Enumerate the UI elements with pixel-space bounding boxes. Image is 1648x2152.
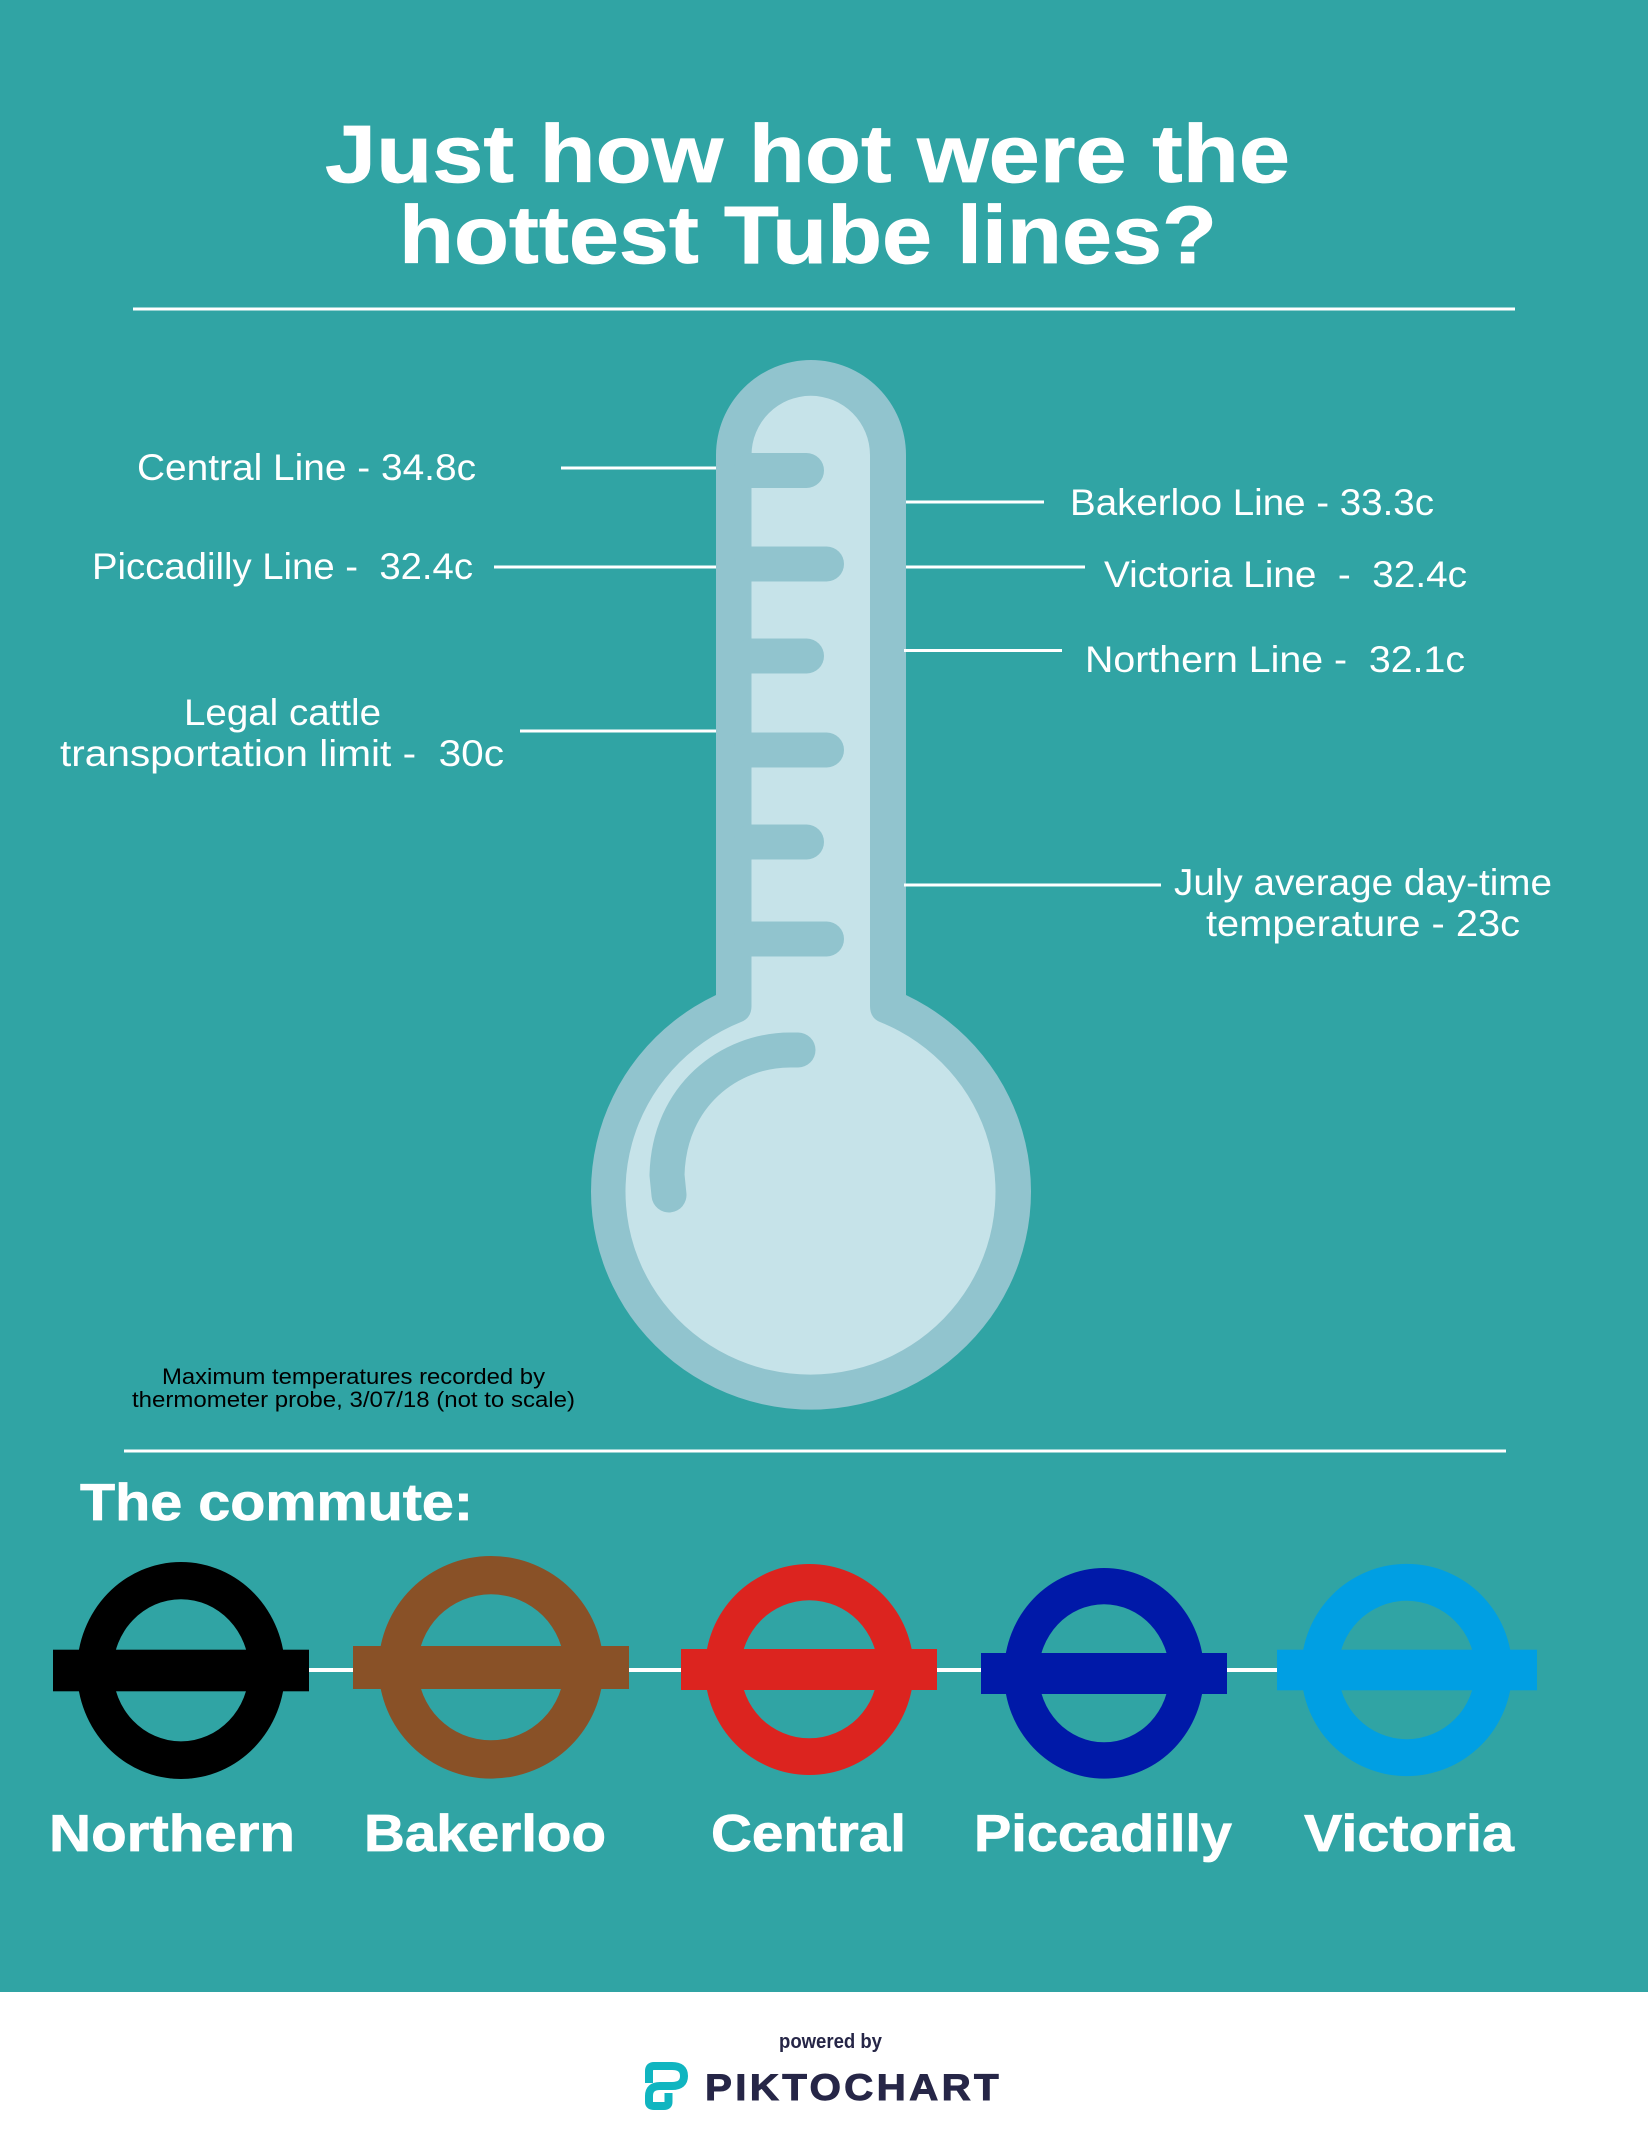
footnote [132, 1364, 575, 1412]
label: Northern Line [904, 639, 1465, 680]
footnote: thermometer probe, 3/07/18 (not to scale) [132, 1387, 575, 1412]
bulb highlight [667, 1050, 798, 1195]
line names: Northern [49, 1805, 295, 1863]
label: Piccadilly Line [92, 546, 716, 587]
roundel: Piccadilly [981, 1568, 1227, 1779]
label: July average day-time temperature: July average day-time [1174, 862, 1552, 903]
line names: Bakerloo [364, 1805, 606, 1863]
roundel: Victoria [1277, 1564, 1537, 1776]
roundel: Central [681, 1564, 937, 1775]
powered by: powered by [779, 2031, 883, 2053]
label: Northern Line: Northern Line - 32.1c [1085, 639, 1465, 680]
label: July average day-time temperature: temperature - 23c [1206, 903, 1520, 944]
wordmark: PIKTOCHART [705, 2067, 1002, 2108]
thermometer tick marks [751, 470, 826, 939]
label: Central Line [137, 447, 716, 488]
label: legal cattle transportation limit: transportation limit - 30c [60, 733, 504, 774]
label: legal cattle transportation limit: Legal cattle [184, 692, 381, 733]
icon: Piktochart logo [649, 2066, 684, 2106]
roundel: Bakerloo [353, 1556, 629, 1779]
label: legal cattle transportation limit [60, 692, 716, 774]
line names [49, 1805, 1515, 1863]
footnote: Maximum temperatures recorded by [162, 1364, 545, 1389]
line names: Central [711, 1805, 906, 1863]
thermometer inner fill [626, 396, 996, 1375]
label: Victoria Line: Victoria Line - 32.4c [1104, 554, 1467, 595]
label: Bakerloo Line: Bakerloo Line - 33.3c [1070, 482, 1434, 523]
thermometer [591, 360, 1031, 1410]
footer: powered by Piktochart [649, 2031, 1002, 2108]
label: Piccadilly Line: Piccadilly Line - 32.4c [92, 546, 473, 587]
tube line connector [300, 1668, 1290, 1672]
roundel: Northern [53, 1562, 309, 1779]
thermometer outer shell [591, 360, 1031, 1410]
label: July average day-time temperature [904, 862, 1552, 944]
temperature labels: right [904, 482, 1552, 944]
label: Bakerloo Line [906, 482, 1434, 523]
title: Just how hot were the [325, 109, 1290, 200]
line names: Victoria [1304, 1805, 1515, 1863]
line names: Piccadilly [974, 1805, 1232, 1863]
label: Central Line: Central Line - 34.8c [137, 447, 476, 488]
label: Victoria Line [906, 554, 1467, 595]
temperature labels: left [60, 447, 716, 774]
title: hottest Tube lines? [399, 190, 1217, 281]
heading: The commute: The commute: [80, 1474, 473, 1532]
title [325, 109, 1290, 281]
